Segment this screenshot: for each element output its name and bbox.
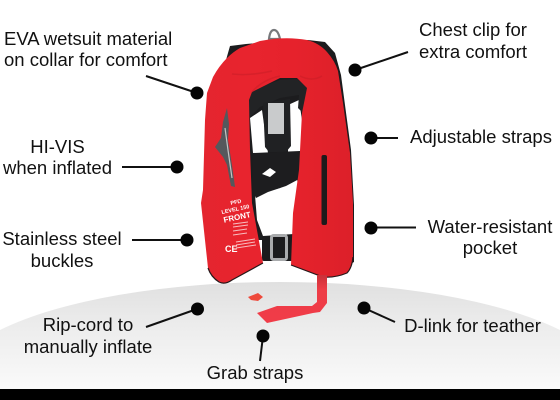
callout: stainless steel buckles: buckles xyxy=(31,250,93,271)
callout: EVA wetsuit material xyxy=(4,28,204,100)
callout: water-resistant pocket: Water-resistant xyxy=(428,216,552,237)
callout: adjustable straps: Adjustable straps xyxy=(410,126,552,147)
callout: chest clip xyxy=(348,19,527,76)
CE mark: CE xyxy=(225,244,238,254)
front label text: LEVEL 150 xyxy=(221,204,250,216)
front label text xyxy=(220,197,252,225)
callout: HI-VIS: HI-VIS xyxy=(30,136,85,157)
waist harness xyxy=(252,151,301,198)
inner white gaps xyxy=(250,100,302,236)
callout: rip-cord: manually inflate xyxy=(24,336,152,357)
strap label xyxy=(268,103,284,134)
callout: D-link xyxy=(358,302,541,336)
collar pad xyxy=(248,79,308,117)
callout: stainless steel buckles: Stainless steel xyxy=(2,228,122,249)
centre strap xyxy=(263,99,291,152)
red inflated bladder xyxy=(201,38,353,283)
front label text: FRONT xyxy=(223,210,252,225)
life jacket xyxy=(201,30,354,323)
floor xyxy=(0,282,560,389)
callout: rip-cord xyxy=(24,302,204,357)
front label text: PFD xyxy=(230,199,242,207)
callout: EVA wetsuit material: EVA wetsuit material xyxy=(4,28,172,49)
rear harness xyxy=(225,40,354,270)
zipper pocket xyxy=(322,155,327,225)
callout: chest clip: Chest clip for xyxy=(419,19,527,40)
callout: EVA wetsuit material: on collar for comfort xyxy=(4,49,167,70)
callout: water-resistant pocket xyxy=(364,216,552,258)
small print xyxy=(233,222,256,248)
D-ring xyxy=(269,30,280,39)
callout: chest clip: extra comfort xyxy=(419,41,527,62)
grab strap xyxy=(257,275,327,323)
rip-cord xyxy=(248,293,263,301)
callout: HI-VIS xyxy=(2,136,184,178)
callout: HI-VIS: when inflated xyxy=(2,157,112,178)
collar folds xyxy=(232,71,322,92)
callout: grab straps: Grab straps xyxy=(207,362,303,383)
logo xyxy=(215,108,235,187)
bottom dark edges xyxy=(208,257,353,283)
callout: rip-cord: Rip-cord to xyxy=(43,314,133,335)
callout: D-link: D-link for teather xyxy=(404,315,541,336)
callout: stainless steel buckles xyxy=(2,228,194,271)
buckle xyxy=(262,236,293,261)
callout: grab straps xyxy=(207,330,303,383)
callout: water-resistant pocket: pocket xyxy=(463,237,517,258)
bottom black bar xyxy=(0,389,560,400)
